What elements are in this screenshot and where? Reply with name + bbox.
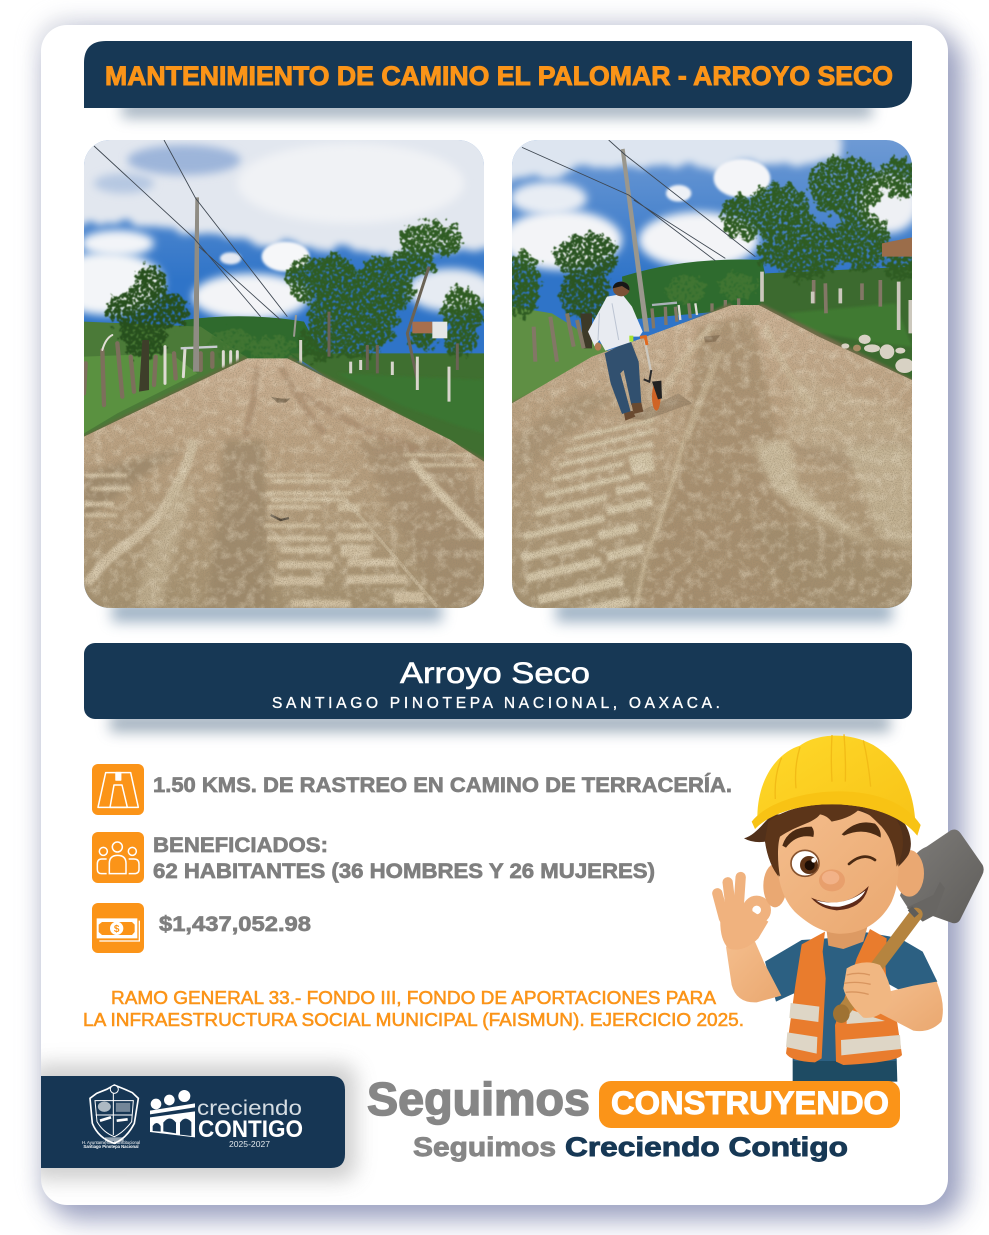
road texture	[84, 358, 484, 608]
municipal coat of arms	[90, 1085, 138, 1143]
municipality: SANTIAGO PINOTEPA NACIONAL, OAXACA.	[272, 695, 720, 712]
nose	[819, 869, 845, 891]
right bank	[291, 353, 484, 473]
head	[613, 282, 630, 296]
left fence	[84, 335, 237, 405]
fence	[534, 272, 910, 362]
council caption: H. Ayuntamiento Constitucional	[82, 1140, 140, 1145]
boots	[624, 411, 635, 421]
raised arm	[726, 942, 781, 1002]
slogan badge: CONSTRUYENDO: CONSTRUYENDO	[611, 1085, 889, 1121]
road surface	[512, 305, 912, 608]
fact: investment	[92, 903, 311, 953]
footer logo panel shadow	[30, 1064, 356, 1180]
middle trees	[665, 273, 757, 303]
holding arm	[877, 982, 943, 1031]
road texture	[512, 282, 912, 608]
neck	[826, 923, 868, 949]
middle trees	[211, 328, 294, 360]
left tree	[106, 265, 189, 358]
photo: worker measuring road with wheel	[512, 140, 912, 608]
vest left	[786, 932, 826, 1062]
winking eye	[849, 857, 875, 864]
illustration: child construction worker with shovel	[717, 734, 984, 1082]
right trees	[722, 157, 922, 280]
place name: Arroyo Seco	[400, 657, 590, 690]
wheel handle	[645, 340, 651, 373]
shirt	[588, 294, 643, 351]
funding note: LA INFRAESTRUCTURA SOCIAL MUNICIPAL (FAISMUN). EJERCICIO 2025.	[83, 1010, 744, 1030]
fact text: 1.50 KMS. DE RASTREO EN CAMINO DE TERRACERÍA.	[153, 772, 732, 797]
utility pole	[94, 140, 287, 372]
slogan: Seguimos Creciendo Contigo	[413, 1132, 848, 1162]
logo: Creciendo Contigo: 2025-2027	[229, 1140, 270, 1149]
road shoulder	[512, 307, 912, 407]
slogan: Seguimos Creciendo Contigo: Creciendo Contigo	[565, 1132, 848, 1162]
logo: Creciendo Contigo	[150, 1090, 303, 1149]
utility pole	[522, 140, 755, 332]
helmet	[752, 734, 921, 836]
face	[777, 808, 898, 934]
title: MANTENIMIENTO DE CAMINO EL PALOMAR - ARROYO SECO	[105, 61, 893, 91]
hand	[595, 343, 601, 351]
right trees	[286, 222, 484, 362]
funding note	[83, 988, 744, 1030]
fact: beneficiaries: 62 HABITANTES (36 HOMBRES Y 26 MUJERES)	[153, 859, 655, 883]
clouds	[499, 127, 919, 270]
amount: $1,437,052.98	[159, 912, 311, 936]
slogan: Seguimos: Seguimos	[367, 1073, 590, 1125]
shirt	[765, 932, 937, 1061]
pants	[793, 1058, 897, 1082]
funding note: RAMO GENERAL 33.- FONDO III, FONDO DE APORTACIONES PARA	[111, 988, 716, 1008]
hills	[184, 316, 320, 362]
icon: banknotes: $	[114, 924, 120, 935]
slogan: Seguimos Creciendo Contigo: Seguimos	[413, 1132, 556, 1162]
council caption	[82, 1140, 140, 1149]
jeans	[605, 340, 641, 414]
logo: Creciendo Contigo: creciendo	[197, 1097, 302, 1120]
fact: beneficiaries	[92, 832, 655, 883]
smile	[811, 886, 869, 910]
left tree	[555, 233, 619, 320]
vest right	[835, 929, 902, 1065]
shadow	[625, 393, 692, 420]
icon: people	[92, 832, 144, 883]
footer logo panel	[41, 1076, 345, 1168]
slogan badge: CONSTRUYENDO	[599, 1081, 900, 1128]
right bank	[761, 267, 912, 380]
wheel	[652, 383, 661, 411]
shovel handle	[842, 914, 916, 1013]
logo: Creciendo Contigo: CONTIGO	[198, 1116, 303, 1143]
worker with measuring wheel	[588, 282, 692, 421]
fringe	[765, 803, 903, 877]
house	[412, 322, 432, 333]
road shoulder	[84, 360, 484, 463]
shovel blade	[900, 829, 984, 923]
fact text: BENEFICIADOS:	[153, 833, 328, 857]
icon: road	[92, 764, 144, 815]
road surface	[84, 358, 484, 608]
hills	[622, 260, 772, 320]
fist	[843, 962, 892, 1018]
location bar shadow	[110, 714, 890, 732]
council caption: Santiago Pinotepa Nacional	[83, 1144, 139, 1149]
palm	[504, 250, 540, 317]
hair back	[744, 805, 911, 878]
ears	[763, 864, 787, 907]
photo: road with utility pole and trees	[84, 140, 484, 608]
icon: banknotes	[92, 903, 144, 953]
eyebrows	[782, 822, 881, 848]
clouds	[51, 120, 504, 320]
photo shadows	[112, 602, 892, 622]
title bar shadow	[122, 100, 872, 118]
open eye	[791, 850, 819, 876]
trunks and posts	[301, 267, 457, 402]
OK hand	[717, 877, 768, 950]
title banner	[84, 41, 912, 108]
fact: road length	[92, 764, 732, 815]
rocks	[841, 335, 914, 373]
location banner	[84, 643, 912, 719]
